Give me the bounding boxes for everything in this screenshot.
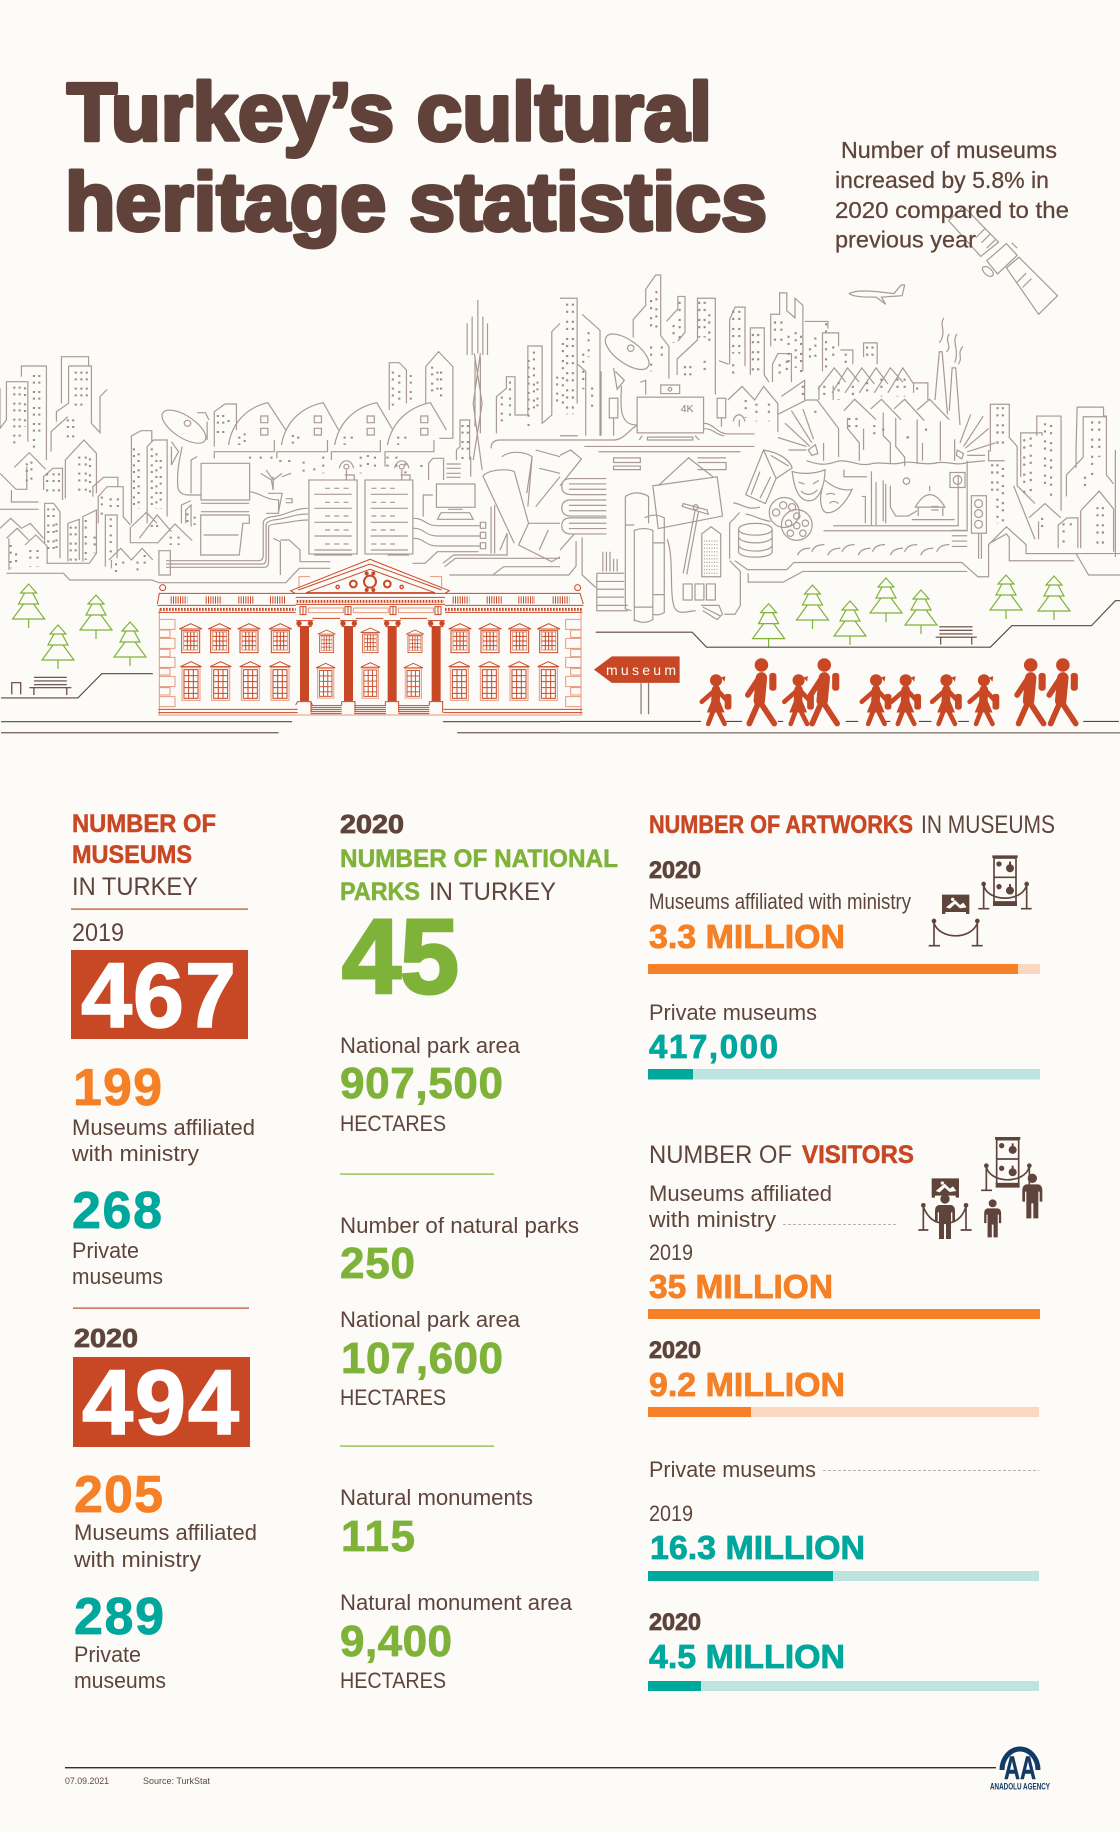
icon: film reels: [769, 497, 812, 540]
panel: artworks: 2020: [649, 857, 701, 884]
national park stats: 907,500: [340, 1059, 503, 1108]
server block and wires: [159, 508, 308, 575]
pediment: [291, 559, 449, 593]
icon: display case and painting: [929, 855, 1032, 946]
2020 block: 205: [74, 1466, 163, 1524]
panel: visitors: 4.5 MILLION: [649, 1638, 845, 1675]
stage seats and screen: [797, 461, 967, 555]
panel: artworks: Private museums: [649, 1000, 817, 1025]
panel: artworks: [648, 811, 1055, 1080]
natural monuments stats: Natural monument area: [340, 1590, 573, 1615]
airplane: [849, 285, 905, 304]
park ground and bench right: [596, 601, 1120, 647]
panel: visitors: Private museums: [649, 1457, 816, 1482]
natural parks stats: Number of natural parks: [340, 1213, 579, 1238]
panel: visitors: Museums affiliated: [649, 1181, 832, 1206]
natural monuments stats: 115: [341, 1512, 415, 1561]
source: Source: TurkStat: [143, 1776, 210, 1786]
icon: television with 4K: 4K: [681, 404, 694, 415]
street lines left: [1, 720, 560, 723]
entablature: [296, 597, 445, 618]
logo: Anadolu Agency: [990, 1749, 1050, 1792]
icon: satellite dish right: [600, 327, 655, 425]
2020 block: Museums affiliated: [74, 1520, 257, 1545]
national park stats: [340, 1033, 521, 1136]
heading: NUMBER OF: [649, 1141, 792, 1169]
speakers and wifi: [609, 386, 778, 436]
museum building: [157, 559, 583, 715]
panel: visitors: 2019: [649, 1501, 693, 1526]
books stack: [560, 450, 606, 587]
heading: NUMBER OF: [72, 810, 216, 838]
panel: visitors: 35 MILLION: [649, 1268, 833, 1305]
2019 block: museums: [72, 1264, 163, 1289]
walls and base: [158, 608, 582, 715]
windows upper: [179, 624, 560, 653]
panel: visitors: 9.2 MILLION: [649, 1366, 845, 1403]
heading: 2020: [340, 809, 404, 839]
books and papers: [483, 440, 560, 562]
circuit lines: [560, 423, 1120, 614]
popcorn box: [746, 450, 792, 504]
natural parks stats: National park area: [340, 1307, 521, 1332]
natural monuments stats: 9,400: [340, 1617, 452, 1666]
2020 block: museums: [74, 1668, 166, 1693]
drawing tubes, paper and tools: [597, 458, 722, 622]
panel: visitors: 2019: [649, 1240, 693, 1265]
panel: number of museums: [71, 810, 257, 1693]
heading: NUMBER OF ARTWORKS: [649, 811, 913, 839]
icon: database cylinders: [733, 503, 772, 557]
title: Turkey’s cultural: [67, 67, 712, 158]
natural parks stats: 107,600: [341, 1334, 503, 1383]
computer stack: [201, 463, 292, 555]
heading: IN TURKEY: [72, 873, 198, 901]
heading: MUSEUMS: [72, 841, 192, 869]
2019 block: 2019: [72, 919, 124, 947]
columns: [296, 621, 445, 713]
cables and connectors: [273, 518, 560, 575]
2019 block: [71, 919, 255, 1289]
panel: artworks: 3.3 MILLION: [649, 918, 845, 955]
callout: museums increase: [835, 137, 1069, 252]
icon: visitors at exhibit: [918, 1137, 1042, 1239]
callout: museums increase: 2020 compared to the: [835, 197, 1069, 223]
heading: PARKS: [340, 878, 420, 906]
city outline right: [560, 275, 1120, 557]
computer: [423, 458, 475, 519]
2019 block: 268: [72, 1182, 162, 1240]
2019 block: Private: [72, 1238, 139, 1263]
heading: [72, 810, 216, 901]
satellite: [949, 206, 1057, 314]
heading: IN TURKEY: [429, 878, 556, 906]
heading: VISITORS: [802, 1141, 914, 1169]
trees right: [753, 575, 1070, 648]
panel: national parks: [340, 809, 618, 1693]
national park stats: National park area: [340, 1033, 521, 1058]
illustration: right city, media and stage objects: [560, 206, 1120, 733]
bar: 3.3 million: [648, 964, 1040, 974]
title: heritage statistics: [65, 157, 767, 248]
national park stats: HECTARES: [340, 1111, 446, 1136]
building dome row: [214, 352, 453, 467]
2020 block: with ministry: [73, 1547, 201, 1572]
bar: 4.5 million: [648, 1681, 1039, 1691]
2019 block: with ministry: [71, 1141, 199, 1166]
heading: [340, 809, 618, 906]
icon: television with 4K: [637, 380, 704, 440]
logo: Anadolu Agency: ANADOLU AGENCY: [990, 1782, 1050, 1792]
cornice and balustrades: [157, 593, 583, 612]
server racks: [309, 461, 413, 554]
natural monuments stats: [340, 1485, 573, 1693]
illustration: left city skyline, circuit and park: [0, 300, 560, 733]
big number 45: 45: [342, 898, 459, 1016]
2020 block: 289: [74, 1588, 164, 1646]
natural parks stats: 250: [340, 1239, 415, 1288]
natural parks stats: HECTARES: [340, 1385, 446, 1410]
2019 block: 467: [81, 945, 236, 1047]
panel: visitors: [648, 1137, 1042, 1691]
natural monuments stats: Natural monuments: [340, 1485, 533, 1510]
panel: artworks: 417,000: [649, 1028, 778, 1065]
corner quoins: [159, 619, 581, 707]
entrance steps: [311, 706, 429, 714]
title: [65, 67, 767, 248]
bar: 417,000: [648, 1069, 1040, 1080]
speaker and traffic light: [950, 472, 986, 559]
2020 block: Private: [74, 1642, 141, 1667]
radio tower: [456, 300, 487, 477]
panel: visitors: with ministry: [648, 1207, 776, 1232]
2020 block: 2020: [74, 1323, 138, 1353]
heading: [649, 1141, 914, 1169]
windows lower: [180, 662, 559, 700]
spotlights and stage curtain: [778, 409, 996, 465]
callout: museums increase: increased by 5.8% in: [835, 167, 1049, 193]
date: 07.09.2021: [65, 1776, 109, 1786]
tree: group left: [13, 584, 146, 669]
2020 block: [73, 1323, 257, 1693]
2020 block: 494: [82, 1352, 239, 1454]
bar: 16.3 million: [648, 1571, 1039, 1581]
icon: theatre masks: [792, 470, 852, 513]
icon: satellite dish left: [156, 404, 211, 527]
2019 block: Museums affiliated: [72, 1115, 255, 1140]
museum signpost: [594, 656, 680, 714]
heading: NUMBER OF NATIONAL: [340, 845, 618, 873]
panel: visitors: 2020: [649, 1609, 701, 1636]
natural monuments stats: HECTARES: [340, 1668, 446, 1693]
museum sign label: museum: [606, 662, 676, 678]
logo: Anadolu Agency: AA: [1004, 1750, 1036, 1786]
panel: visitors: 2020: [649, 1337, 701, 1364]
natural parks stats: [340, 1213, 579, 1410]
left city outline: [0, 357, 330, 583]
heading: IN MUSEUMS: [921, 811, 1055, 839]
walking school group: [702, 658, 1078, 724]
park ground and bench left: [1, 674, 153, 698]
windows right city: [563, 291, 1103, 546]
footer: [65, 1749, 1050, 1792]
street lines right: [560, 720, 1119, 723]
callout: museums increase: previous year: [835, 226, 976, 252]
panel: visitors: 16.3 MILLION: [650, 1529, 865, 1566]
windows left city: [11, 352, 557, 575]
panel: artworks: Museums affiliated with ministry: [649, 889, 911, 914]
2019 block: 199: [73, 1059, 162, 1117]
bar: 9.2 million: [648, 1407, 1039, 1417]
bar: 35 million: [648, 1309, 1040, 1319]
callout: museums increase: Number of museums: [841, 137, 1057, 163]
